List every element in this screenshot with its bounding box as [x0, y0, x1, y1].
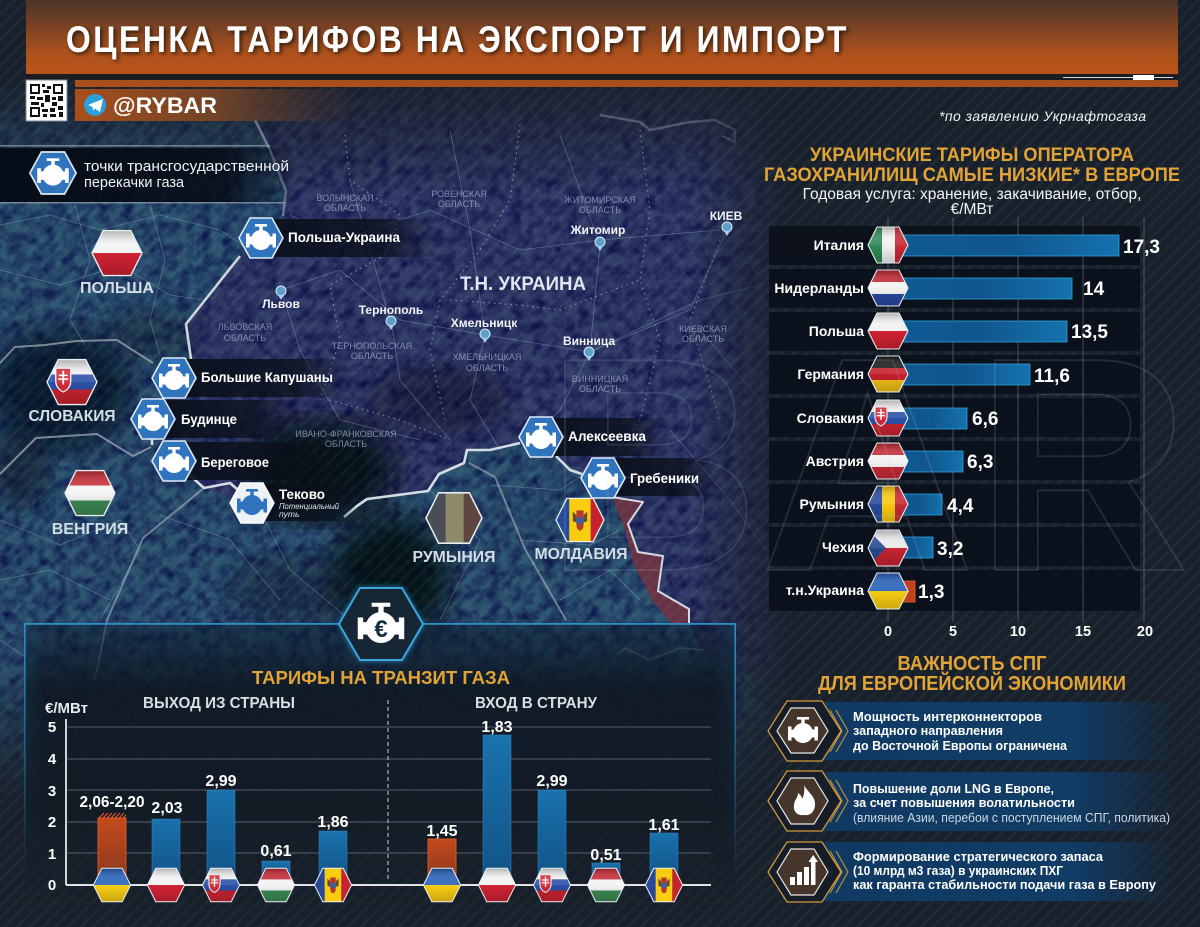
- oblast labels: ОБЛАСТЬ: [579, 205, 621, 215]
- value labels: 2,06-2,20: [80, 794, 145, 811]
- values: [918, 237, 1160, 603]
- panel: storage tariffs: [764, 145, 1180, 640]
- marker: Tekovo: Теково: [279, 487, 325, 502]
- x-axis: [66, 884, 711, 886]
- header title bar: [26, 0, 1178, 74]
- country names: т.н.Украина: [786, 582, 864, 598]
- title: ОЦЕНКА ТАРИФОВ НА ЭКСПОРТ И ИМПОРТ: [66, 19, 849, 60]
- city labels and pins: КИЕВ: [710, 209, 743, 223]
- card 3: как гаранта стабильности подачи газа в Европу: [853, 877, 1157, 892]
- row backgrounds: [769, 226, 1140, 611]
- value labels: 1,86: [317, 814, 349, 831]
- marker: Poland-Ukraine: Польша-Украина: [288, 230, 400, 245]
- heading: УКРАИНСКИЕ ТАРИФЫ ОПЕРАТОРА: [810, 145, 1134, 166]
- oblast labels: ЖИТОМИРСКАЯ: [564, 195, 636, 205]
- card 2: [768, 771, 1180, 831]
- card 2: за счет повышения волатильности: [853, 795, 1075, 810]
- marker: Tekovo: путь: [279, 509, 299, 519]
- oblast labels: РОВЕНСКАЯ: [431, 189, 487, 199]
- marker: Budince: Будинце: [181, 412, 237, 427]
- oblast labels: ОБЛАСТЬ: [325, 439, 367, 449]
- legend band: [0, 145, 300, 204]
- country: Romania: РУМЫНИЯ: [412, 549, 496, 566]
- QR code: [26, 80, 67, 121]
- oblast labels: ТЕРНОПОЛЬСКАЯ: [332, 341, 412, 351]
- card 1: [768, 701, 1180, 761]
- value labels: 0,51: [590, 847, 622, 864]
- city labels and pins: Хмельницк: [451, 316, 518, 330]
- subtitle: €/МВт: [951, 201, 993, 218]
- city labels and pins: Тернополь: [359, 303, 423, 317]
- country names: Чехия: [822, 539, 864, 555]
- axis labels: 20: [1137, 624, 1153, 640]
- heading: ДЛЯ ЕВРОПЕЙСКОЙ ЭКОНОМИКИ: [818, 671, 1126, 695]
- bars: [895, 235, 1119, 602]
- country: Romania: [412, 493, 496, 566]
- channel handle bar: [75, 89, 360, 121]
- values: 13,5: [1071, 322, 1108, 343]
- marker: Beregovoe: [152, 441, 334, 481]
- country names: Румыния: [800, 496, 864, 512]
- hatch on range: [99, 813, 126, 818]
- marker: Grebeniki: Гребеники: [630, 471, 699, 486]
- marker: Grebeniki: [581, 458, 718, 498]
- axis labels: [884, 624, 1153, 640]
- oblast labels: ОБЛАСТЬ: [438, 199, 480, 209]
- values: 4,4: [947, 496, 974, 517]
- y-axis: 2: [48, 814, 56, 831]
- country: Hungary: [52, 470, 128, 538]
- footnote: *по заявлению Укрнафтогаза: [939, 108, 1146, 124]
- oblast labels: ОБЛАСТЬ: [224, 333, 266, 343]
- legend text: точки трансгосударственной: [84, 159, 289, 175]
- value labels: 1,61: [648, 817, 680, 834]
- panel: LNG importance: [768, 653, 1180, 902]
- marker: Tekovo: [230, 483, 357, 523]
- country names: Италия: [814, 237, 864, 253]
- y-axis: 1: [48, 846, 56, 863]
- values: 3,2: [937, 539, 963, 560]
- marker: Bolshie Kapushany: [152, 358, 349, 398]
- oblast labels: [218, 189, 727, 449]
- card 1: Мощность интерконнекторов: [853, 709, 1042, 724]
- icon: valve with euro: [339, 588, 423, 660]
- card 3: [768, 842, 1180, 902]
- card 3: (10 млрд м3 газа) в украинских ПХГ: [853, 863, 1064, 878]
- divider: [387, 700, 389, 882]
- values: 11,6: [1034, 366, 1070, 387]
- oblast labels: ХМЕЛЬНИЦКАЯ: [453, 352, 521, 362]
- city labels and pins: Львов: [262, 297, 300, 311]
- values: 1,3: [918, 582, 944, 603]
- heading: ВАЖНОСТЬ СПГ: [898, 653, 1046, 675]
- card 3: Формирование стратегического запаса: [853, 849, 1104, 864]
- y-axis: [48, 719, 66, 894]
- marker: Alekseevka: [519, 417, 666, 457]
- axis labels: 0: [884, 624, 892, 640]
- value labels: 0,61: [260, 843, 292, 860]
- grid lines: [66, 727, 711, 853]
- oblast labels: ВИННИЦКАЯ: [572, 374, 628, 384]
- city labels and pins: Житомир: [570, 223, 625, 237]
- oblast labels: ОБЛАСТЬ: [682, 334, 724, 344]
- axis labels: 5: [949, 624, 957, 640]
- y-axis: 5: [48, 719, 56, 736]
- country: Poland: ПОЛЬША: [80, 280, 154, 297]
- y-axis: 3: [48, 783, 56, 800]
- card 1: западного направления: [853, 723, 1003, 738]
- oblast labels: ИВАНО-ФРАНКОВСКАЯ: [295, 429, 397, 439]
- axis labels: 15: [1075, 624, 1091, 640]
- unit: €/МВт: [45, 700, 88, 717]
- oblast labels: КИЕВСКАЯ: [679, 324, 727, 334]
- bars: [98, 735, 678, 879]
- oblast labels: ОБЛАСТЬ: [324, 203, 366, 213]
- heading: ГАЗОХРАНИЛИЩ САМЫЕ НИЗКИЕ* В ЕВРОПЕ: [764, 165, 1180, 186]
- oblast labels: ОБЛАСТЬ: [579, 384, 621, 394]
- country names: [774, 237, 864, 598]
- value labels: 2,99: [536, 773, 568, 790]
- marker: Alekseevka: Алексеевка: [568, 429, 646, 444]
- panel: transit tariffs: [24, 588, 736, 927]
- oblast labels: ОБЛАСТЬ: [351, 351, 393, 361]
- country names: Австрия: [806, 453, 864, 469]
- country names: Польша: [809, 323, 864, 339]
- axis labels: 10: [1010, 624, 1026, 640]
- marker: Bolshie Kapushany: Большие Капушаны: [201, 370, 333, 385]
- grid lines: [888, 217, 1144, 622]
- map of western Ukraine and neighbours: [0, 88, 810, 808]
- values: 17,3: [1123, 237, 1160, 258]
- country: Slovakia: [28, 360, 116, 425]
- card 1: до Восточной Европы ограничена: [853, 738, 1068, 753]
- country: Hungary: ВЕНГРИЯ: [52, 521, 128, 538]
- heading: ТАРИФЫ НА ТРАНЗИТ ГАЗА: [252, 668, 510, 688]
- country: Poland: [80, 230, 154, 297]
- marker: Budince: [131, 399, 298, 439]
- value labels: [80, 719, 680, 864]
- handle text: @RYBAR: [113, 93, 217, 118]
- value labels: 2,03: [151, 800, 183, 817]
- icon: valve with euro: €: [374, 616, 388, 643]
- subtitle: Годовая услуга: хранение, закачивание, отбор,: [803, 186, 1141, 203]
- oblast labels: ОБЛАСТЬ: [466, 363, 508, 373]
- legend text: перекачки газа: [84, 175, 185, 191]
- country names: Нидерланды: [774, 280, 864, 296]
- value labels: 2,99: [205, 773, 237, 790]
- values: 6,3: [967, 452, 993, 473]
- marker: Beregovoe: Береговое: [201, 455, 269, 470]
- icon: telegram: [84, 94, 106, 116]
- icon: valve marker: [30, 152, 76, 194]
- value labels: 1,45: [426, 823, 458, 840]
- values: 14: [1083, 279, 1105, 300]
- y-axis: 4: [48, 751, 57, 768]
- card 2: (влияние Азии, перебои с поступлением СПГ, политика): [853, 811, 1170, 825]
- city labels and pins: [262, 209, 743, 361]
- flags row: [93, 868, 683, 902]
- watermark RYBAR: BAR: [545, 294, 1190, 635]
- card 2: Повышение доли LNG в Европе,: [853, 781, 1054, 796]
- oblast labels: ВОЛЫНСКАЯ: [316, 193, 374, 203]
- subheading: entry: ВХОД В СТРАНУ: [475, 695, 598, 712]
- y-axis: 0: [48, 877, 56, 894]
- country: Moldova: МОЛДАВИЯ: [534, 546, 628, 563]
- header accent line: [26, 74, 1178, 87]
- country names: Словакия: [797, 410, 864, 426]
- values: 6,6: [972, 409, 998, 430]
- flags: [868, 227, 908, 609]
- oblast labels: ЛЬВОВСКАЯ: [218, 322, 272, 332]
- marker: Poland-Ukraine: [239, 218, 436, 258]
- city labels and pins: Винница: [563, 334, 615, 348]
- country: Slovakia: СЛОВАКИЯ: [28, 408, 116, 425]
- label: Ukraine: Т.Н. УКРАИНА: [460, 274, 586, 295]
- country names: Германия: [797, 366, 864, 382]
- subheading: exit: ВЫХОД ИЗ СТРАНЫ: [143, 695, 295, 712]
- country: Moldova: [534, 498, 628, 563]
- marker: Tekovo: Потенциальный: [279, 501, 339, 511]
- value labels: 1,83: [481, 719, 513, 736]
